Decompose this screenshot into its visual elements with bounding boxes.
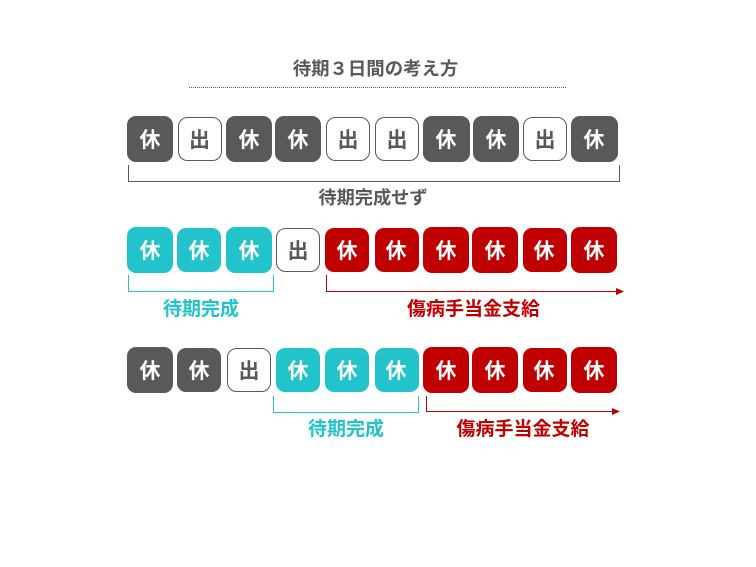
label: waiting period completed, row 3: 待期完成 bbox=[308, 417, 384, 440]
day 10 off: 休 bbox=[584, 129, 604, 152]
day 6 waiting bbox=[375, 348, 419, 392]
day 7 benefit: 休 bbox=[436, 240, 456, 263]
day 10 benefit bbox=[571, 227, 617, 273]
day 1 waiting: 休 bbox=[140, 240, 160, 263]
bracket: row 1 bbox=[128, 165, 620, 182]
title: 待期３日間の考え方 bbox=[293, 58, 458, 79]
day 3 waiting: 休 bbox=[238, 240, 260, 263]
day 9 benefit: 休 bbox=[534, 360, 554, 383]
label: benefit paid, row 2: 傷病手当金支給 bbox=[407, 298, 540, 320]
label: benefit paid, row 3: 傷病手当金支給 bbox=[456, 418, 590, 440]
day 3 work bbox=[228, 348, 270, 392]
day 9 work bbox=[524, 118, 566, 160]
day 4 waiting: 休 bbox=[288, 360, 308, 383]
day 6 benefit: 休 bbox=[386, 240, 406, 263]
day 5 work bbox=[326, 118, 370, 160]
day 7 benefit bbox=[423, 347, 469, 393]
day 6 waiting: 休 bbox=[386, 360, 406, 383]
row 3: waiting period after work day then benefit bbox=[127, 347, 617, 393]
day 4 waiting bbox=[276, 348, 320, 392]
day 2 off: 休 bbox=[188, 360, 210, 383]
day 10 off bbox=[571, 116, 618, 162]
day 7 benefit: 休 bbox=[436, 360, 456, 383]
day 4 off: 休 bbox=[288, 129, 308, 152]
day 9 benefit: 休 bbox=[534, 240, 554, 263]
day 8 off: 休 bbox=[486, 129, 506, 152]
day 2 waiting bbox=[177, 228, 221, 272]
bracket: row 2 waiting period bbox=[128, 275, 274, 292]
day 1 waiting bbox=[127, 227, 173, 273]
day 8 benefit: 休 bbox=[484, 240, 506, 263]
day 5 benefit bbox=[325, 228, 369, 272]
day 2 work: 出 bbox=[189, 129, 210, 152]
bracket: row 3 waiting period bbox=[274, 396, 418, 412]
day 7 off bbox=[423, 116, 470, 162]
day 1 off bbox=[127, 116, 173, 162]
day 2 waiting: 休 bbox=[188, 240, 210, 263]
day 4 off bbox=[275, 116, 321, 162]
day 5 waiting: 休 bbox=[336, 360, 358, 383]
day 6 benefit bbox=[375, 228, 419, 272]
day 3 work: 出 bbox=[238, 360, 260, 383]
day 5 waiting bbox=[325, 348, 369, 392]
day 3 off bbox=[226, 116, 272, 162]
day 4 work: 出 bbox=[288, 240, 308, 263]
day 8 benefit bbox=[472, 347, 518, 393]
label: waiting period not completed: 待期完成せず bbox=[318, 187, 428, 208]
day 8 off bbox=[473, 116, 519, 162]
day 9 benefit bbox=[523, 348, 567, 392]
day 9 benefit bbox=[523, 228, 567, 272]
day 1 off: 休 bbox=[140, 360, 160, 383]
day 1 off bbox=[127, 347, 173, 393]
day 3 off: 休 bbox=[238, 129, 260, 152]
day 10 benefit bbox=[571, 347, 617, 393]
day 8 benefit: 休 bbox=[484, 360, 506, 383]
arrow: row 2 benefit period bbox=[326, 275, 624, 295]
day 6 work bbox=[376, 118, 418, 160]
day 7 off: 休 bbox=[436, 129, 456, 152]
day 7 benefit bbox=[423, 227, 469, 273]
day 5 work: 出 bbox=[338, 129, 358, 152]
day 4 work bbox=[276, 228, 320, 272]
arrow: row 3 benefit period bbox=[426, 396, 620, 415]
row 2: waiting period completed then benefit bbox=[127, 227, 617, 273]
day 5 benefit: 休 bbox=[336, 240, 358, 263]
day 1 off: 休 bbox=[140, 129, 160, 152]
day 9 work: 出 bbox=[534, 129, 556, 152]
day 2 off bbox=[177, 348, 221, 392]
label: waiting period completed, row 2: 待期完成 bbox=[163, 297, 239, 320]
day 6 work: 出 bbox=[386, 129, 408, 152]
day 10 benefit: 休 bbox=[584, 360, 604, 383]
day 8 benefit bbox=[472, 227, 518, 273]
day 3 waiting bbox=[226, 227, 272, 273]
row 1: days without waiting period completed bbox=[127, 116, 618, 162]
day 10 benefit: 休 bbox=[584, 240, 604, 263]
day 2 work bbox=[178, 118, 222, 160]
